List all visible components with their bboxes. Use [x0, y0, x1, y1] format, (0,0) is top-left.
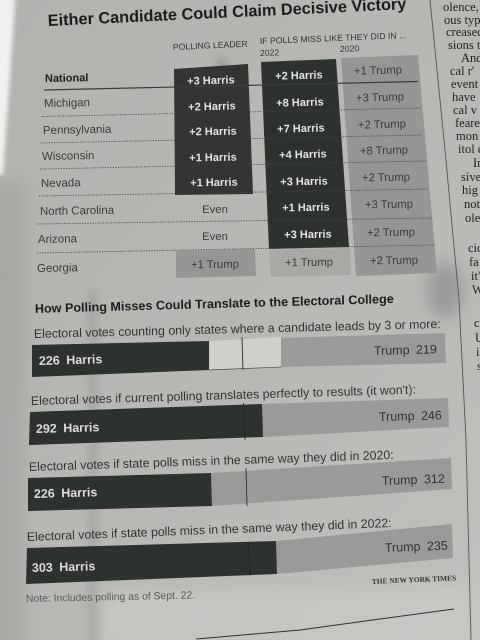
bar 2: 292 Harris	[36, 420, 100, 436]
adjacent article text: ole	[465, 211, 480, 225]
state labels: Michigan	[44, 97, 90, 110]
bar 1	[32, 317, 446, 377]
2020 values	[354, 64, 418, 267]
bar 3: Trump 312	[382, 472, 445, 488]
state labels: Pennsylvania	[43, 124, 112, 137]
adjacent article text: olence,	[443, 0, 479, 14]
bar 1: Trump 219	[374, 342, 437, 358]
bar 3: 226 Harris	[34, 485, 98, 501]
adjacent article text: cal r'	[450, 64, 474, 78]
table columns	[174, 55, 437, 278]
polling leader values	[187, 74, 239, 271]
2022 values: +4 Harris	[279, 148, 327, 162]
polling leader values: +2 Harris	[189, 126, 237, 138]
2020 values: +1 Trump	[354, 64, 402, 78]
adjacent article text: have	[452, 90, 476, 104]
state labels: National	[45, 72, 88, 85]
adjacent article text	[443, 0, 480, 373]
bar 4: Electoral votes if state polls miss in the same way they did in 2022:	[27, 516, 392, 544]
bottom rule	[196, 609, 454, 639]
adjacent article text: fa	[469, 255, 479, 269]
state labels: Nevada	[41, 177, 81, 190]
adjacent article text: mon	[456, 129, 479, 143]
2020 values: +3 Trump	[365, 199, 413, 211]
state labels	[37, 72, 115, 275]
2020 values: +8 Trump	[360, 144, 408, 158]
section heading: How Polling Misses Could Translate to the Electoral College	[35, 292, 394, 316]
bar 4: 303 Harris	[32, 559, 96, 575]
2020 values: +3 Trump	[356, 91, 404, 105]
column headers	[173, 30, 406, 58]
2020 light column	[341, 55, 437, 276]
column headers: 2022	[260, 47, 280, 58]
2022 values: +1 Trump	[285, 257, 333, 269]
2022 values: +2 Harris	[275, 69, 323, 83]
adjacent article text: i	[476, 345, 480, 359]
bar 2: Trump 246	[379, 408, 442, 424]
polling leader values: Even	[202, 204, 228, 216]
adjacent article text: sions t	[448, 38, 480, 52]
polling leader values: +1 Harris	[189, 152, 237, 164]
2022 values: +1 Harris	[282, 202, 330, 214]
state labels: Arizona	[38, 233, 78, 246]
bar 3	[28, 448, 452, 511]
bar 2	[29, 383, 449, 445]
adjacent article text: ous typ	[444, 13, 480, 27]
polling leader values: +1 Trump	[191, 259, 239, 271]
adjacent article text: it'	[471, 269, 480, 283]
bar 2: Electoral votes if current polling translates perfectly to results (it won't):	[31, 383, 416, 408]
adjacent article text: not	[464, 197, 480, 211]
polling leader dark column	[174, 64, 253, 195]
2022 values: +3 Harris	[280, 176, 328, 188]
polling leader Georgia cell	[176, 249, 256, 278]
source credit: THE NEW YORK TIMES	[372, 573, 456, 586]
2022 values	[275, 69, 333, 269]
polling leader values: Even	[202, 231, 228, 243]
2022 values: +3 Harris	[284, 229, 332, 241]
2022 values: +7 Harris	[277, 122, 325, 136]
adjacent article text: event	[451, 77, 479, 91]
column headers: POLLING LEADER	[173, 39, 248, 52]
adjacent article column divider	[430, 0, 471, 640]
polling leader values: +3 Harris	[187, 74, 235, 88]
2020 values: +2 Trump	[358, 118, 406, 132]
polling leader values: +1 Harris	[190, 177, 238, 189]
2022 dark column	[261, 59, 349, 249]
2020 values: +2 Trump	[367, 227, 415, 239]
adjacent article text: feare	[455, 116, 480, 130]
adjacent article text: cal v	[453, 103, 478, 117]
bar 1: Electoral votes counting only states where a candidate leads by 3 or more:	[34, 317, 441, 341]
adjacent article text: c	[474, 316, 480, 330]
column headers: IF POLLS MISS LIKE THEY DID IN ...	[260, 30, 406, 46]
state labels: North Carolina	[40, 205, 115, 218]
bar 4: Trump 235	[385, 539, 448, 555]
2022 Georgia cell	[269, 248, 351, 277]
state labels: Georgia	[37, 262, 79, 275]
state labels: Wisconsin	[42, 150, 94, 163]
adjacent article text: hig	[462, 183, 479, 197]
bar 4	[26, 516, 453, 584]
row lines	[37, 82, 435, 253]
2020 values: +2 Trump	[362, 172, 410, 184]
bar 3: Electoral votes if state polls miss in the same way they did in 2020:	[29, 448, 394, 474]
polling leader values: +2 Harris	[188, 100, 236, 114]
2022 values: +8 Harris	[276, 96, 324, 110]
footnote: Note: Includes polling as of Sept. 22.	[26, 590, 195, 605]
2020 values: +2 Trump	[370, 255, 418, 267]
bar 1: 226 Harris	[39, 352, 103, 368]
column headers: 2020	[340, 43, 360, 54]
